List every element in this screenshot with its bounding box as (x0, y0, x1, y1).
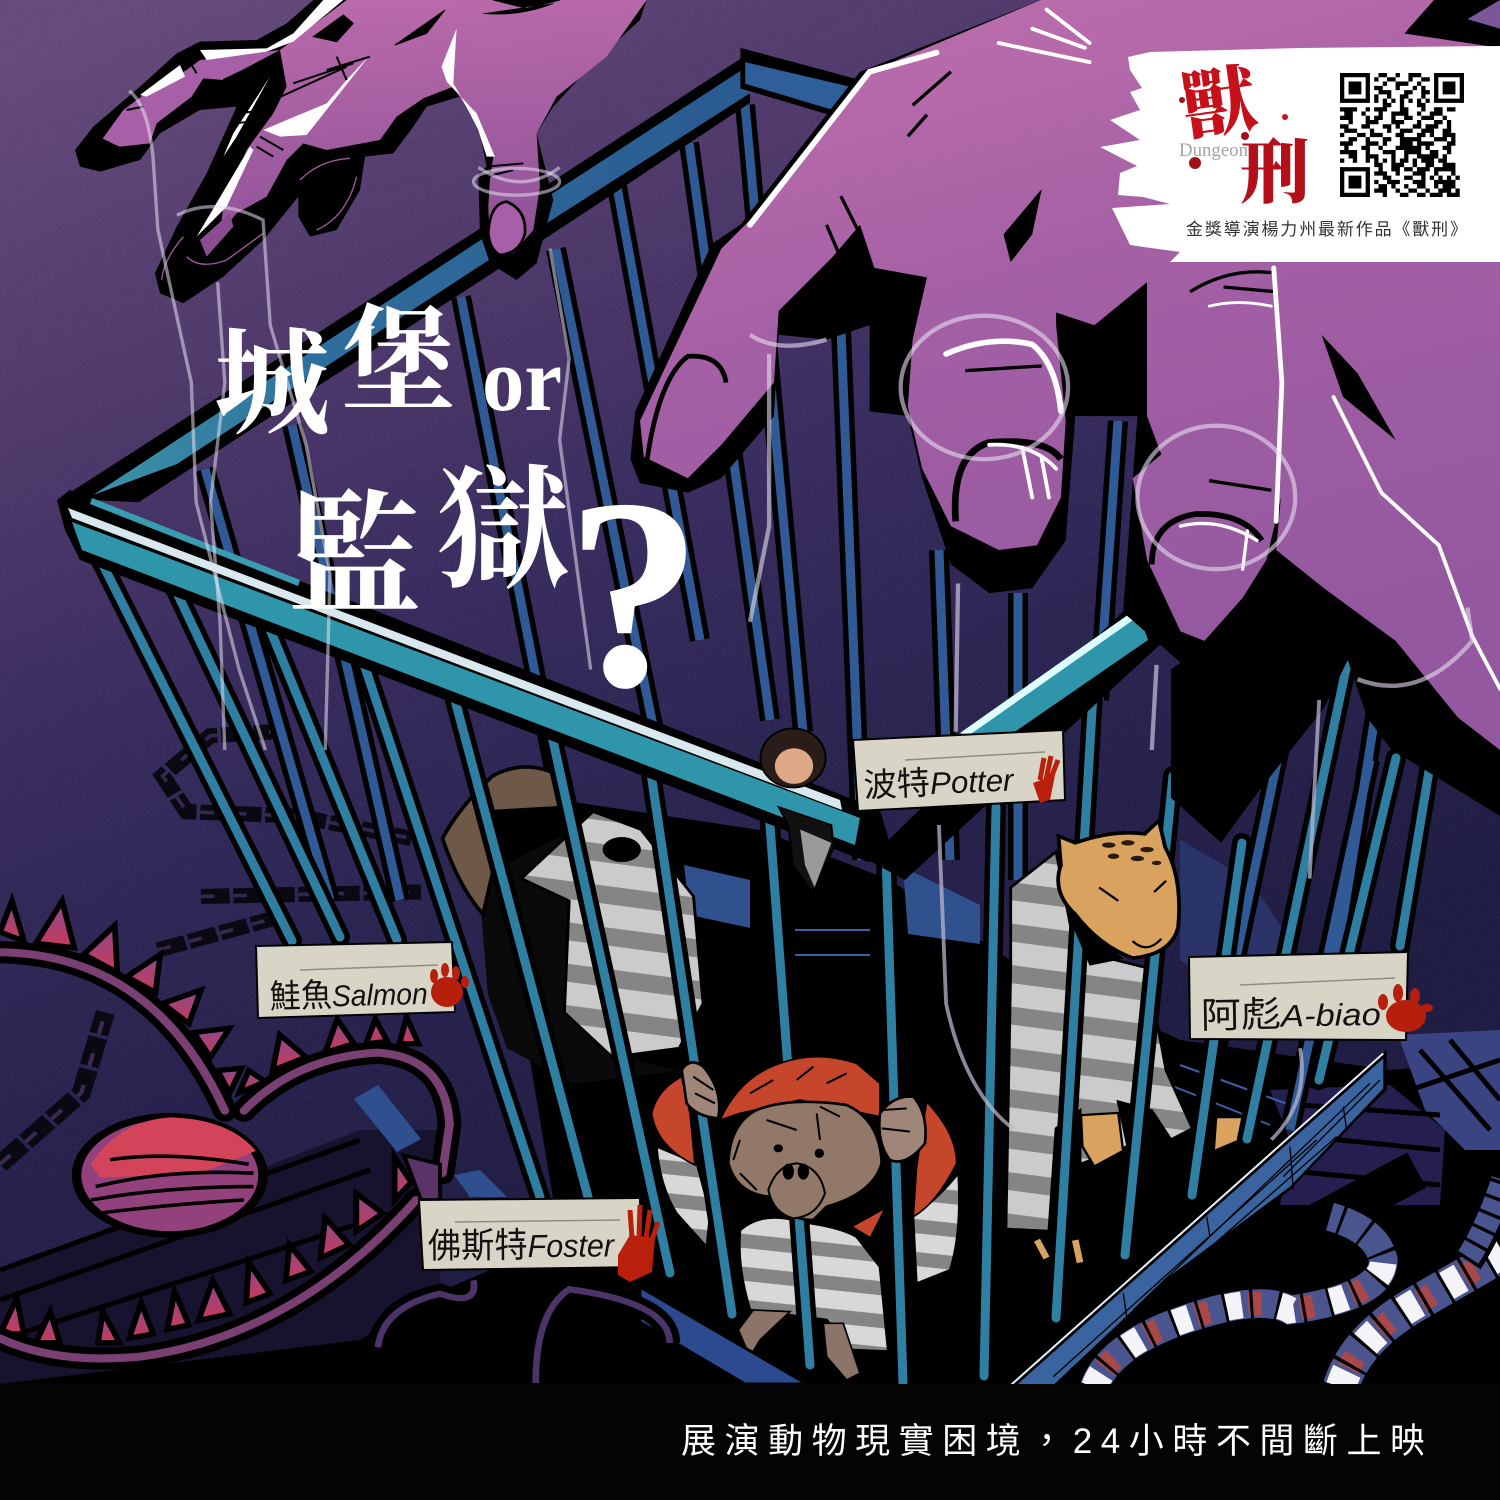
icon: hand print (1033, 756, 1058, 803)
promo panel (1100, 46, 1500, 262)
cage floor front rails and whip (1011, 1050, 1500, 1390)
QR code (1340, 75, 1464, 195)
finger highlights (750, 10, 1500, 689)
label: A-biao (1189, 952, 1433, 1040)
animal: tiger body (1006, 852, 1243, 1262)
finger nails (200, 213, 233, 257)
icon: tiger paw (1378, 984, 1433, 1032)
logo (1177, 58, 1310, 213)
right hand (630, 0, 1500, 843)
hand skin (640, 0, 1500, 750)
title: castle or prison: or (482, 331, 562, 430)
logo: Dungeon (1179, 140, 1248, 161)
trap jaws (0, 952, 450, 1358)
logo: 刑 (1240, 136, 1310, 213)
band caption: 展演動物現實困境，24小時不間斷上映 (681, 1422, 1425, 1461)
title: castle or prison: 獄 (436, 458, 574, 606)
label: Potter (853, 730, 1065, 811)
icon: hand print (618, 1205, 658, 1282)
trap plate (72, 1113, 268, 1238)
back chains (158, 731, 421, 950)
animal: orangutan body (652, 1077, 959, 1380)
hand shadow (630, 0, 1500, 843)
cage back bars (205, 105, 1444, 1130)
promo caption: 金獎導演楊力州最新作品《獸刑》 (1186, 220, 1467, 239)
cage floor and dark interior (0, 800, 1500, 1384)
title: castle or prison: 堡 (340, 299, 456, 427)
puppet strings (129, 91, 591, 750)
title: castle or prison: 監 (288, 483, 422, 631)
trap chain left (0, 1012, 105, 1164)
label: Salmon: 鮭魚Salmon (269, 974, 428, 1015)
top-right dark finger (1404, 0, 1500, 48)
bottom band (0, 1384, 1500, 1500)
nail outlines (647, 72, 1276, 564)
mid shadow (1322, 335, 1396, 440)
animal: bear Salmon (442, 767, 703, 1084)
floor rail right (1011, 1050, 1387, 1385)
title: castle or prison: 城 (214, 322, 330, 450)
cage front rail left (57, 490, 895, 862)
title: castle or prison: ? (566, 443, 702, 744)
label: A-biao: 阿彪A-biao (1200, 992, 1381, 1036)
animal: tiger head (1058, 821, 1179, 966)
bear trap (0, 901, 670, 1383)
index finger skin (102, 50, 280, 147)
cage front rail right (868, 325, 1500, 880)
hand marks (313, 0, 560, 45)
trap spikes (0, 901, 419, 1343)
label: Foster: 佛斯特Foster (428, 1225, 615, 1266)
icon: bear paw (430, 963, 469, 1007)
label: Salmon (256, 942, 469, 1018)
animal: orangutan head and hands (682, 1057, 926, 1220)
cage back rail (56, 53, 750, 502)
title: castle or prison (214, 299, 702, 744)
animal: small monkey Potter (761, 729, 834, 892)
cage front bars (93, 421, 1487, 1383)
hand highlights (140, 0, 508, 237)
logo: 獸 (1177, 58, 1268, 151)
left hand (75, 0, 647, 303)
white brush panel (1100, 46, 1500, 262)
palm skin (220, 0, 647, 253)
whip strands (1093, 1170, 1500, 1390)
label: Foster (419, 1198, 658, 1282)
hand shadow outline (75, 0, 647, 303)
label: Potter: 波特Potter (863, 760, 1016, 804)
